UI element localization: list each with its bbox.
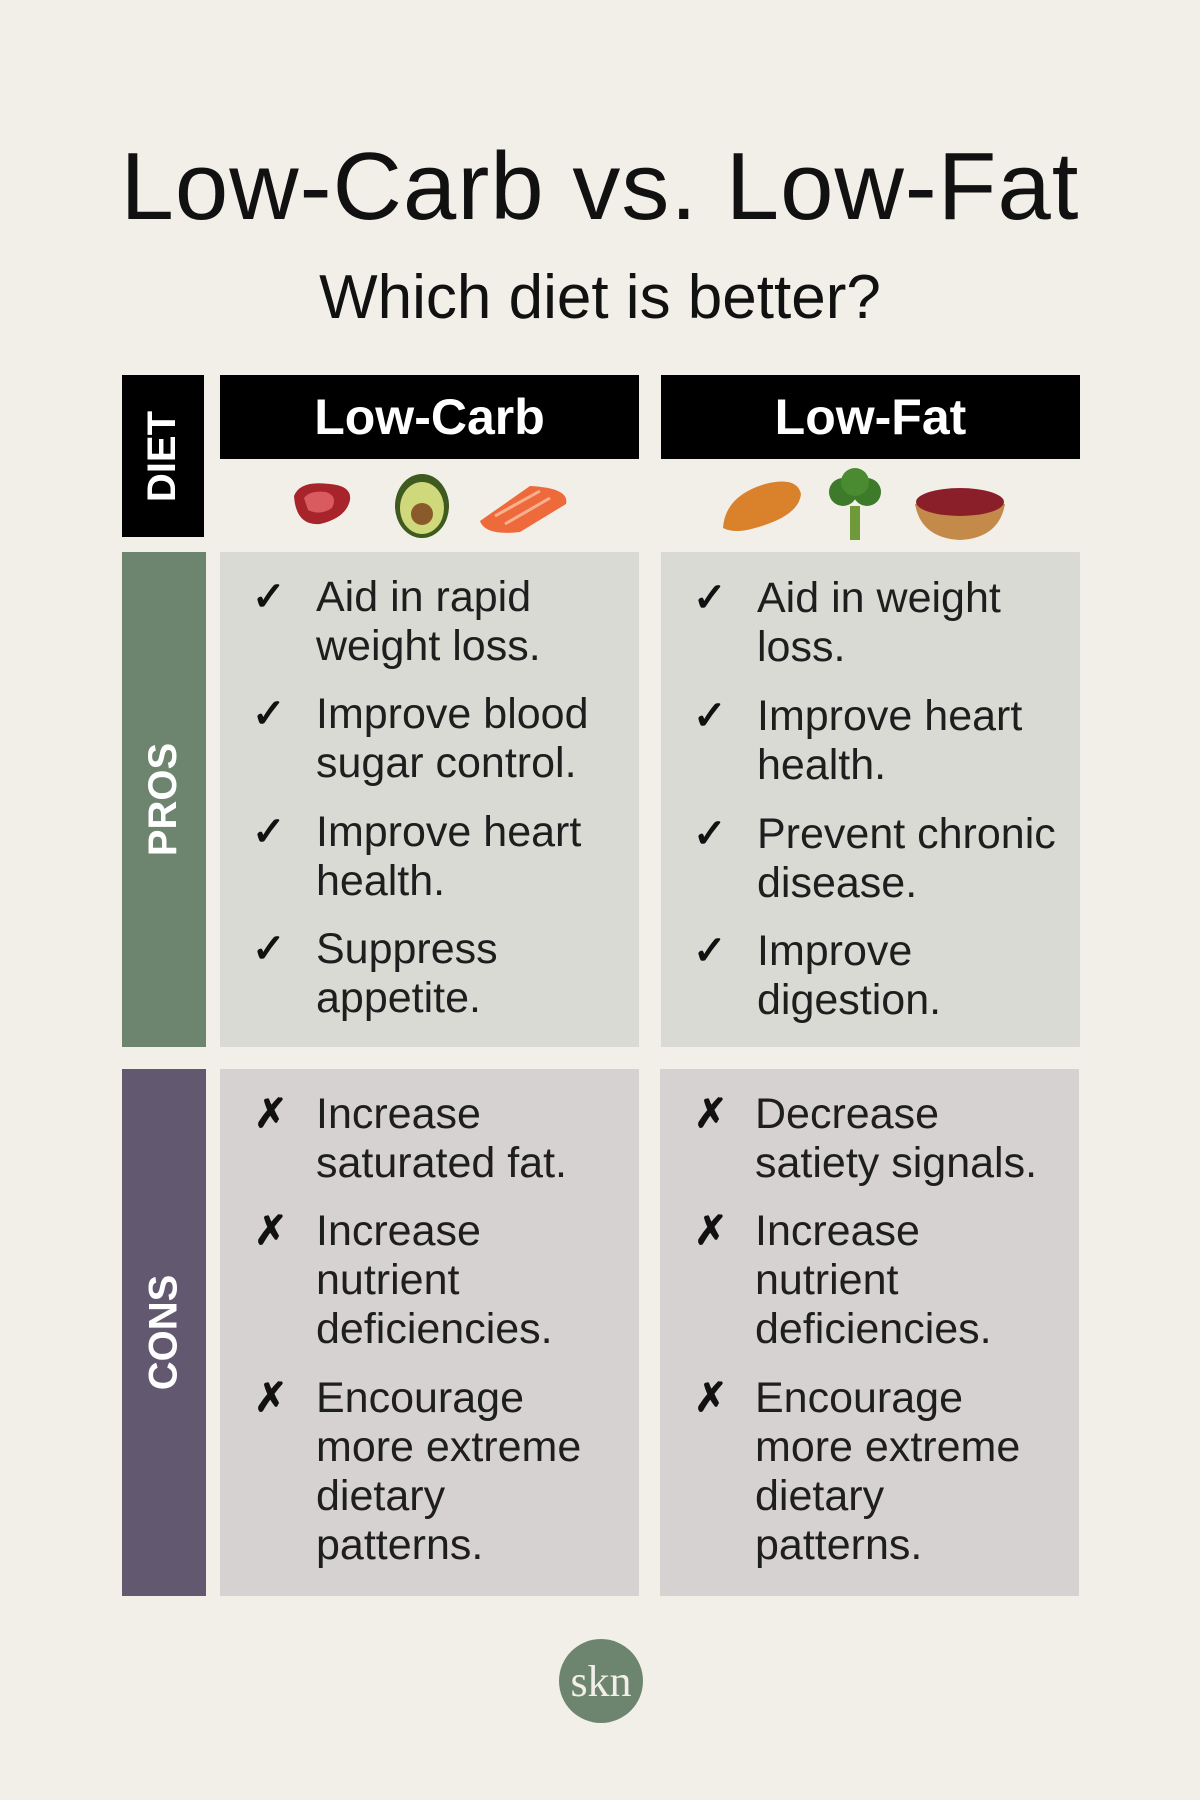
- panel: low-carb cons: more extreme: [316, 1423, 581, 1471]
- con item 1: ✗: [694, 1092, 728, 1136]
- panel: low-carb pros: Improve heart: [316, 808, 581, 856]
- icon: steak: [294, 483, 350, 524]
- panel: low-fat pros: health.: [757, 741, 886, 789]
- panel: low-fat pros: Aid in weight: [757, 574, 1001, 622]
- logo: skn: [570, 1657, 632, 1706]
- panel: low-fat cons: Encourage: [755, 1374, 963, 1422]
- panel: low-carb cons: [220, 1069, 639, 1596]
- con item 1: ✗: [254, 1092, 288, 1136]
- panel: low-fat pros: Improve heart: [757, 692, 1022, 740]
- label: pros: [122, 552, 206, 1047]
- panel: low-fat pros: Prevent chronic: [757, 810, 1056, 858]
- con item 3: ✗: [254, 1376, 288, 1420]
- pro item 3: ✓: [252, 810, 286, 854]
- panel: low-carb cons: Increase: [316, 1090, 481, 1138]
- icon: salmon: [480, 486, 566, 533]
- subtitle: Which diet is better?: [319, 263, 881, 332]
- con item 2: ✗: [254, 1209, 288, 1253]
- con item 3: ✗: [694, 1376, 728, 1420]
- panel: low-fat cons: satiety signals.: [755, 1139, 1037, 1187]
- panel: low-carb pros: Aid in rapid: [316, 573, 531, 621]
- panel: low-carb pros: Improve blood: [316, 690, 588, 738]
- panel: low-carb cons: saturated fat.: [316, 1139, 567, 1187]
- panel: low-carb pros: appetite.: [316, 974, 481, 1022]
- pro item 3: ✓: [693, 812, 727, 856]
- pro item 2: ✓: [252, 692, 286, 736]
- panel: low-carb cons: patterns.: [316, 1521, 483, 1569]
- header: low-carb: [220, 375, 639, 459]
- icon: bean bowl: [915, 488, 1005, 540]
- pro item 1: ✓: [252, 575, 286, 619]
- panel: low-carb pros: [220, 552, 639, 1047]
- panel: low-carb cons: dietary: [316, 1472, 445, 1520]
- panel: low-fat cons: dietary: [755, 1472, 884, 1520]
- panel: low-carb cons: Increase: [316, 1207, 481, 1255]
- pro item 1: ✓: [693, 576, 727, 620]
- header: low-fat: [661, 375, 1080, 459]
- panel: low-fat cons: patterns.: [755, 1521, 922, 1569]
- label: cons: [122, 1069, 206, 1596]
- icon: broccoli: [829, 468, 881, 540]
- label: diet: DIET: [140, 410, 184, 502]
- panel: low-fat cons: nutrient: [755, 1256, 898, 1304]
- pro item 4: ✓: [693, 929, 727, 973]
- panel: low-fat pros: loss.: [757, 623, 845, 671]
- pro item 4: ✓: [252, 927, 286, 971]
- panel: low-fat pros: disease.: [757, 859, 917, 907]
- panel: low-carb pros: weight loss.: [316, 622, 541, 670]
- header: low-carb: Low-Carb: [314, 389, 545, 445]
- icon: sweet potato: [723, 482, 801, 531]
- panel: low-carb pros: sugar control.: [316, 739, 577, 787]
- icon: avocado: [395, 474, 449, 538]
- con item 2: ✗: [694, 1209, 728, 1253]
- panel: low-fat cons: [660, 1069, 1079, 1596]
- panel: low-fat pros: digestion.: [757, 976, 941, 1024]
- title: Low-Carb vs. Low-Fat: [121, 133, 1079, 240]
- logo: [559, 1639, 643, 1723]
- panel: low-carb pros: Suppress: [316, 925, 498, 973]
- pro item 2: ✓: [693, 694, 727, 738]
- panel: low-carb cons: Encourage: [316, 1374, 524, 1422]
- label: diet: [122, 375, 204, 537]
- header: low-fat: Low-Fat: [775, 389, 966, 445]
- panel: low-carb cons: deficiencies.: [316, 1305, 553, 1353]
- panel: low-fat cons: more extreme: [755, 1423, 1020, 1471]
- panel: low-fat cons: Increase: [755, 1207, 920, 1255]
- panel: low-fat pros: Improve: [757, 927, 912, 975]
- icons: low-carb foods: [294, 474, 566, 538]
- icons: low-fat foods: [723, 468, 1005, 540]
- panel: low-fat cons: Decrease: [755, 1090, 939, 1138]
- panel: low-carb cons: nutrient: [316, 1256, 459, 1304]
- label: cons: CONS: [142, 1275, 186, 1390]
- label: pros: PROS: [142, 743, 186, 856]
- panel: low-carb pros: health.: [316, 857, 445, 905]
- panel: low-fat cons: deficiencies.: [755, 1305, 992, 1353]
- panel: low-fat pros: [661, 552, 1080, 1047]
